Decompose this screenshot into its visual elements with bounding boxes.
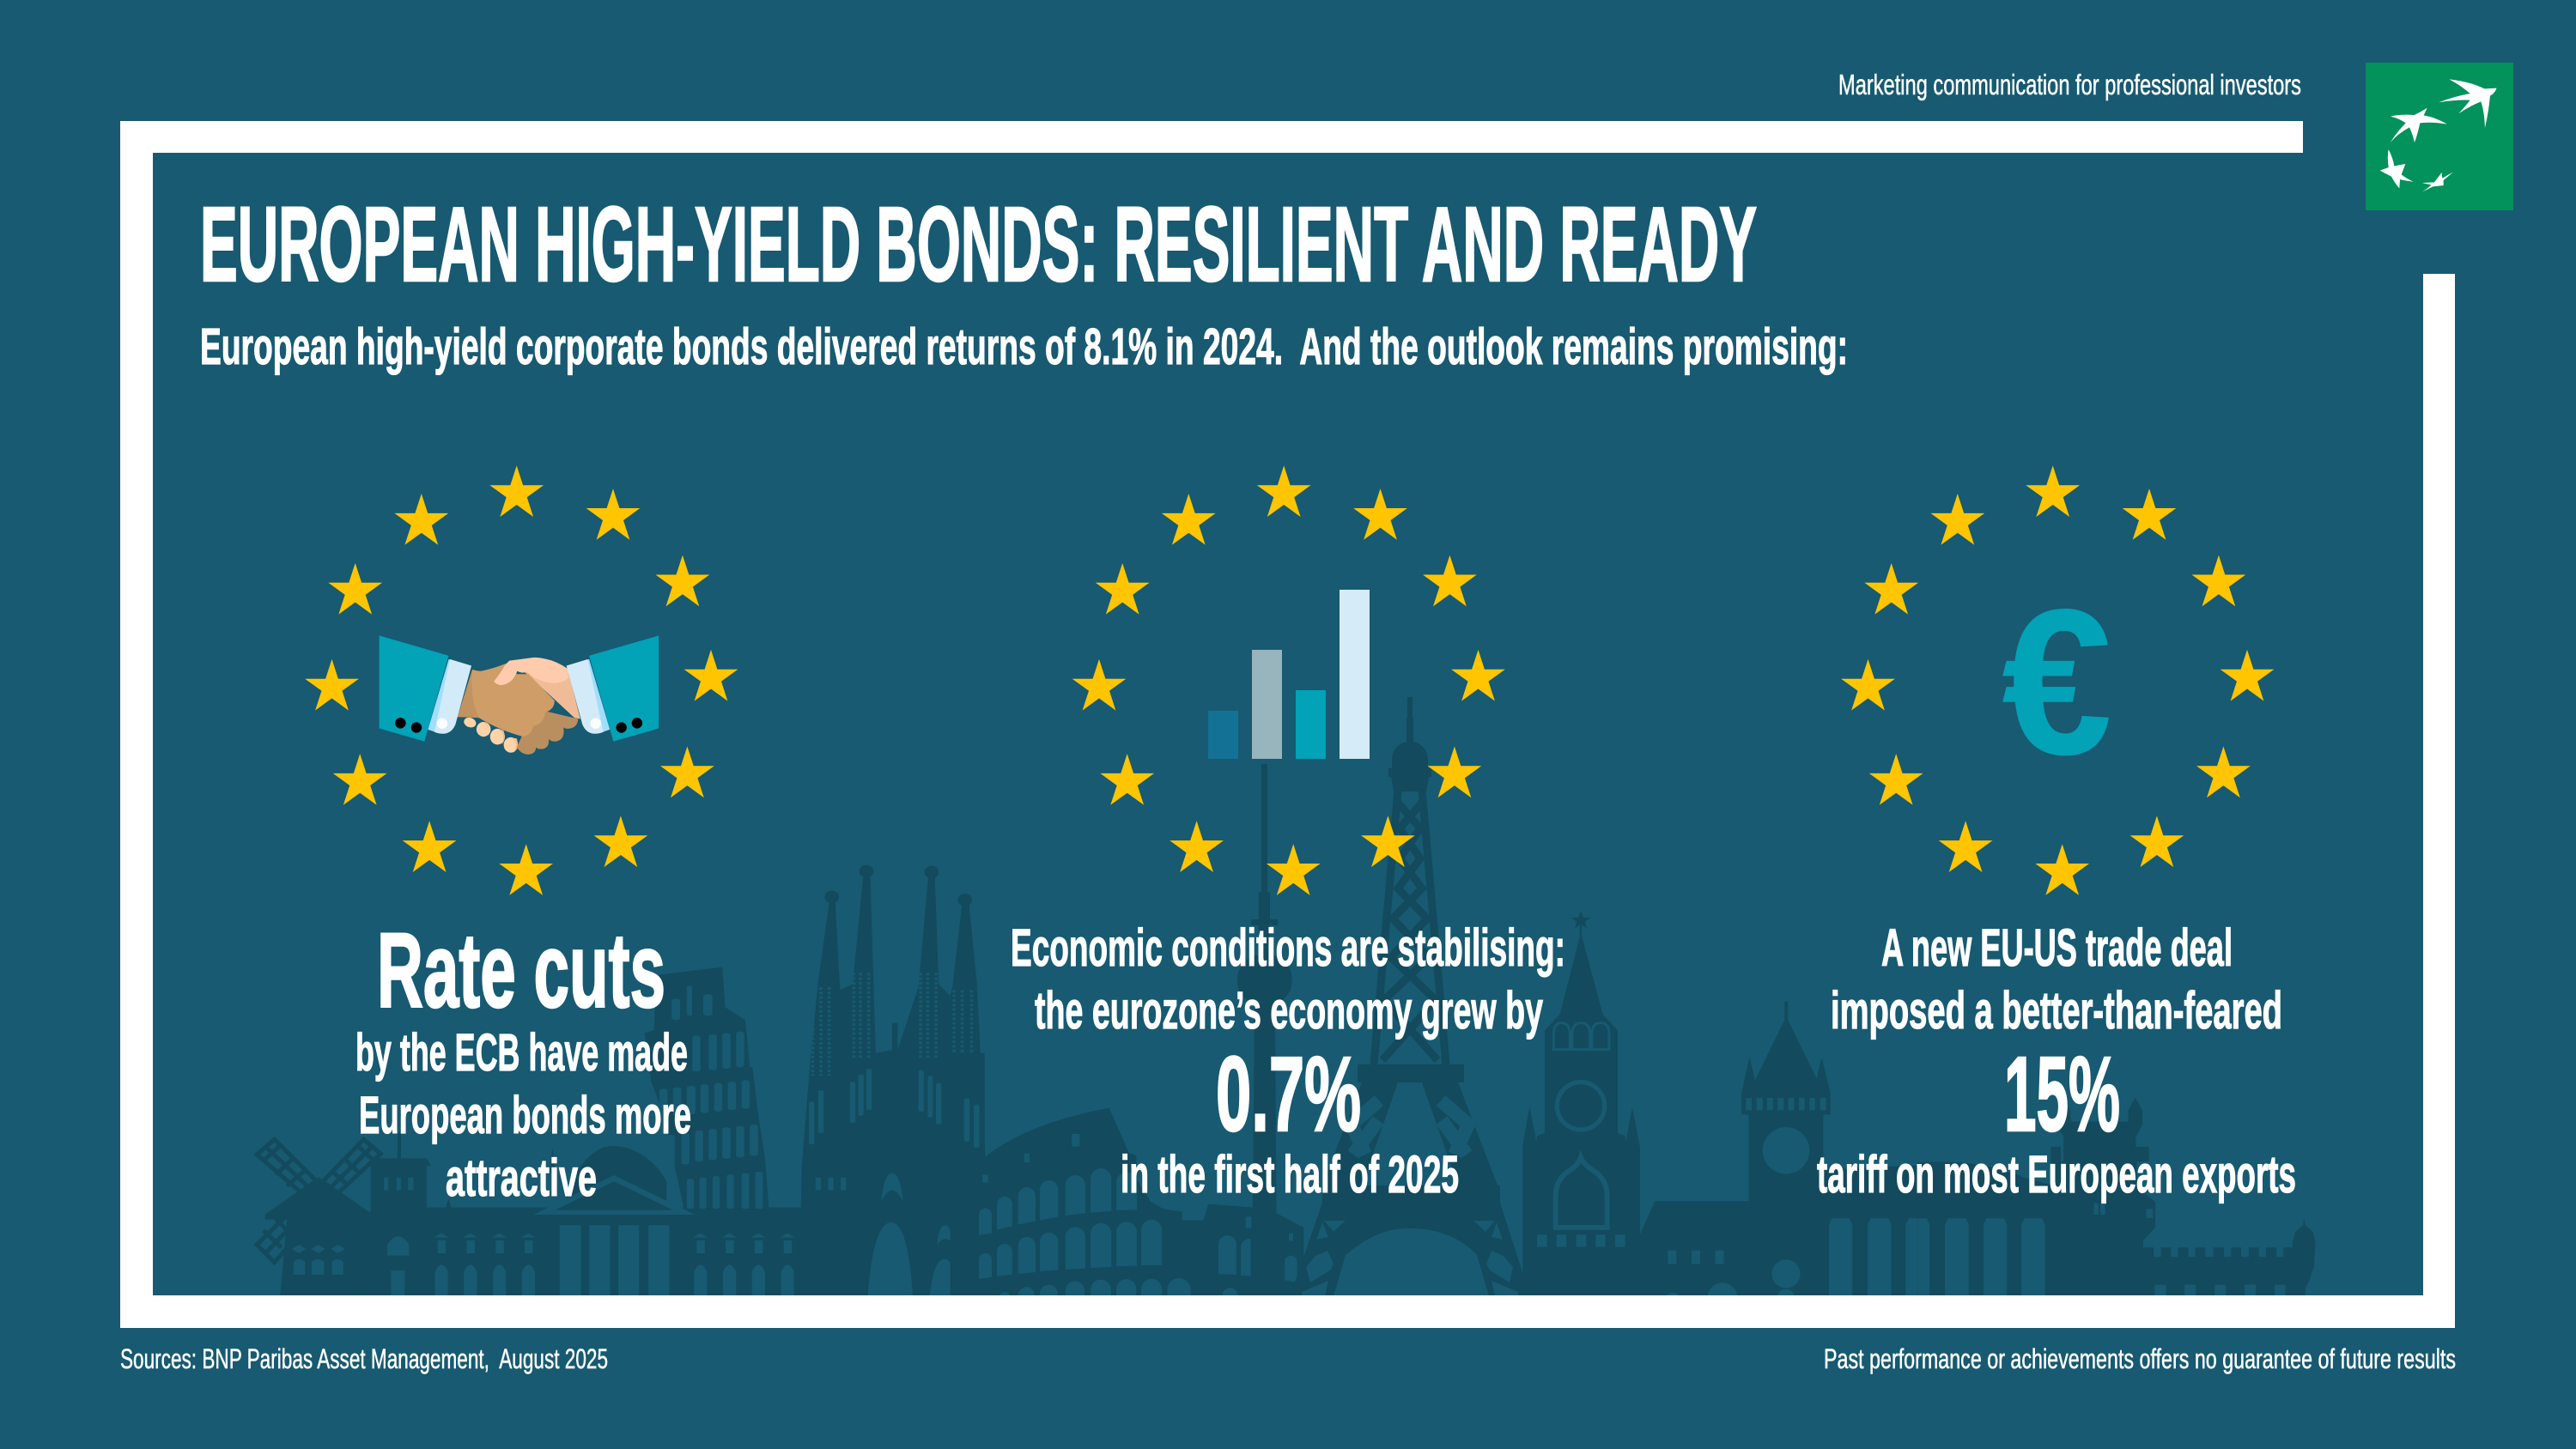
icon: handshake bbox=[380, 635, 659, 755]
disclaimer: marketing communication: Marketing communication for professional investors bbox=[1838, 69, 2301, 100]
text block: rate cuts explanation: by the ECB have made bbox=[355, 1023, 688, 1082]
panel: rate cuts bbox=[305, 465, 738, 1207]
panel: trade deal bbox=[1817, 465, 2296, 1203]
landmark: leaning tower bbox=[645, 967, 769, 1209]
text block: rate cuts explanation: European bonds more bbox=[359, 1086, 691, 1144]
text block: rate cuts explanation bbox=[355, 1023, 691, 1207]
text block: economic conditions: the eurozone’s economy grew by bbox=[1035, 981, 1543, 1040]
icon: euro sign: € bbox=[2002, 567, 2112, 798]
landmark: castle with battlements bbox=[1917, 1097, 2316, 1302]
landmark: cathedral spires bbox=[799, 865, 985, 1299]
ring of stars bbox=[305, 465, 738, 895]
text block: economic conditions: Economic conditions are stabilising: bbox=[1011, 919, 1565, 977]
text block: economic conditions bbox=[1011, 919, 1565, 1040]
text block: first half of 2025: in the first half of 2025 bbox=[1121, 1145, 1459, 1203]
figure: 15%: 15% bbox=[2004, 1036, 2120, 1154]
logo: BNP Paribas stars bbox=[2366, 63, 2513, 210]
skyline silhouette of European landmarks bbox=[257, 697, 2316, 1313]
white frame bbox=[120, 121, 2455, 1328]
landmark: windmill, palace, leaning tower and cathedral bbox=[257, 865, 985, 1300]
ring of stars bbox=[1841, 465, 2274, 895]
text block: trade deal: A new EU-US trade deal bbox=[1881, 919, 2233, 977]
panel: economic conditions bbox=[1011, 465, 1565, 1203]
landmark: clock tower and hall bbox=[1640, 1002, 1932, 1313]
figure: 0.7%: 0.7% bbox=[1216, 1036, 1361, 1154]
text block: rate cuts explanation: attractive bbox=[446, 1149, 597, 1207]
text block: trade deal: imposed a better-than-feared bbox=[1831, 981, 2282, 1040]
landmark: kremlin tower bbox=[1522, 912, 1640, 1302]
heading: rate cuts: Rate cuts bbox=[377, 912, 665, 1030]
ring of stars bbox=[1072, 465, 1505, 895]
landmark: eiffel tower bbox=[1287, 697, 1533, 1305]
landmark: colosseum bbox=[951, 1053, 1303, 1299]
footer: sources: Sources: BNP Paribas Asset Management, August 2025 bbox=[120, 1343, 608, 1374]
landmark: television tower bbox=[1237, 764, 1292, 1305]
text block: trade deal bbox=[1831, 919, 2282, 1040]
icon: bar chart bbox=[1208, 590, 1370, 759]
